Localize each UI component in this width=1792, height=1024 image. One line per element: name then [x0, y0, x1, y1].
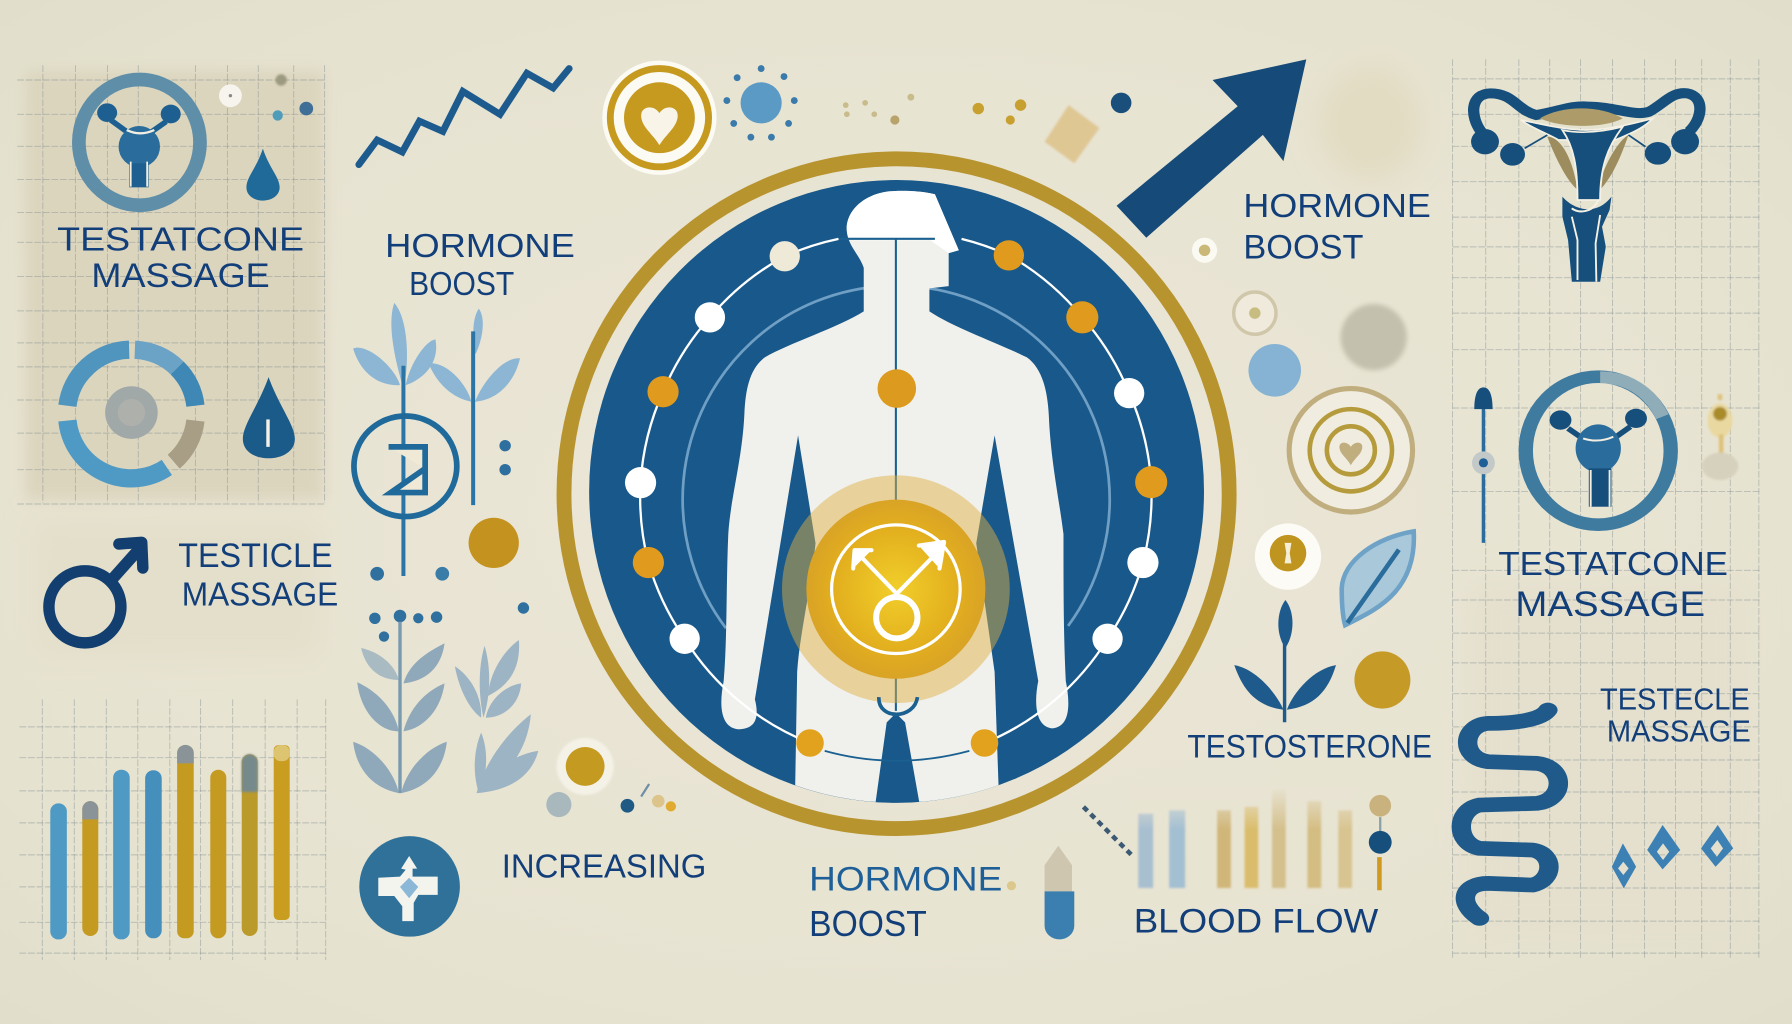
orbit line: [640, 239, 1152, 743]
central body diagram: [564, 159, 1229, 829]
small ring dot: [1192, 238, 1217, 263]
icon: winding vessel: [1461, 710, 1558, 918]
gold circle: [469, 518, 519, 568]
pin icon: [1369, 795, 1392, 890]
orbit dots: [625, 240, 1167, 757]
icon: cone vial: [1045, 846, 1074, 939]
leaf icon: [1342, 531, 1414, 625]
text: testecle massage: MASSAGE: [1607, 714, 1751, 749]
halo: [782, 475, 1010, 703]
heading: testatcone massage: TESTATCONE: [57, 221, 304, 258]
arrow: upward: [1117, 59, 1306, 238]
heading: testatcone massage: [57, 221, 304, 295]
grey blurred circle: [1341, 304, 1407, 370]
blue circle: [1248, 344, 1301, 397]
text: testosterone: TESTOSTERONE: [1187, 729, 1432, 765]
text: hormone boost lower: HORMONE: [809, 860, 1002, 898]
icon: second leaf sprig: [455, 640, 538, 793]
text: testecle massage: TESTECLE: [1600, 682, 1750, 717]
scattered dots: [546, 784, 676, 817]
text: hormone boost upper left: BOOST: [409, 266, 514, 303]
text: testatcone massage right: [1498, 546, 1728, 624]
icon: large drop: [243, 377, 295, 458]
gold dot with halo: [557, 738, 614, 795]
icon: blue circle with cross: [359, 836, 460, 937]
zigzag trend line: [359, 69, 569, 165]
body silhouette: [721, 191, 1068, 805]
icon: ring with small organ: [1526, 377, 1671, 525]
icon: water drop: [246, 149, 280, 201]
text: testicle massage: TESTICLE: [178, 537, 333, 575]
icon: gold keyhole: [1702, 394, 1738, 480]
icon: grey leaf sprig: [353, 602, 529, 793]
icon: male symbol: [49, 542, 143, 643]
text: hormone boost upper left: HORMONE: [385, 228, 575, 265]
icon: blue sun: [723, 65, 798, 141]
blue disc: [589, 180, 1204, 803]
dotted diagonal: [1083, 807, 1131, 855]
icon: pin line: [1472, 387, 1495, 543]
text: hormone boost upper right: BOOST: [1243, 228, 1363, 266]
concentric target with heart: [1289, 389, 1413, 512]
inner arc: [683, 286, 1110, 628]
male-female symbol: [832, 525, 960, 653]
plant icon: [1234, 600, 1336, 722]
icon: three diamonds: [1612, 825, 1733, 888]
gold coin icon: [1255, 523, 1321, 590]
text: testatcone massage right: TESTATCONE: [1498, 546, 1728, 583]
icon: ring with reproductive organ: [79, 80, 200, 205]
panel: left top: [57, 74, 313, 478]
icon: large reproductive organ: [1471, 93, 1700, 282]
text: hormone boost lower: BOOST: [809, 903, 927, 944]
gold core: [806, 500, 985, 679]
scattered top dots: [843, 93, 1131, 163]
tan ring dot: [1234, 292, 1276, 334]
text: testicle massage: MASSAGE: [182, 577, 338, 614]
gold circle right: [1354, 651, 1410, 709]
gold ring: [564, 159, 1229, 829]
text: hormone boost upper right: HORMONE: [1243, 188, 1431, 225]
text: hormone boost upper left: [385, 228, 575, 303]
text: blood flow: BLOOD FLOW: [1134, 903, 1379, 941]
small dots: [219, 74, 313, 121]
text: testicle massage: [178, 537, 338, 614]
text: hormone boost upper right: [1243, 188, 1431, 266]
icon: plant and circle: [353, 303, 520, 581]
text: testatcone massage right: MASSAGE: [1515, 584, 1705, 624]
text: increasing: INCREASING: [502, 849, 706, 886]
donut chart: [67, 350, 195, 478]
icon: gold medallion with heart: [602, 61, 717, 175]
blood flow bar chart: [1131, 786, 1358, 888]
bar chart: [50, 745, 290, 939]
heading: testatcone massage: MASSAGE: [91, 257, 270, 295]
panel: top left backdrop: [25, 71, 325, 501]
panel: right side: [1461, 93, 1751, 918]
text: hormone boost lower: [809, 860, 1002, 944]
text: testecle massage: [1600, 682, 1751, 749]
